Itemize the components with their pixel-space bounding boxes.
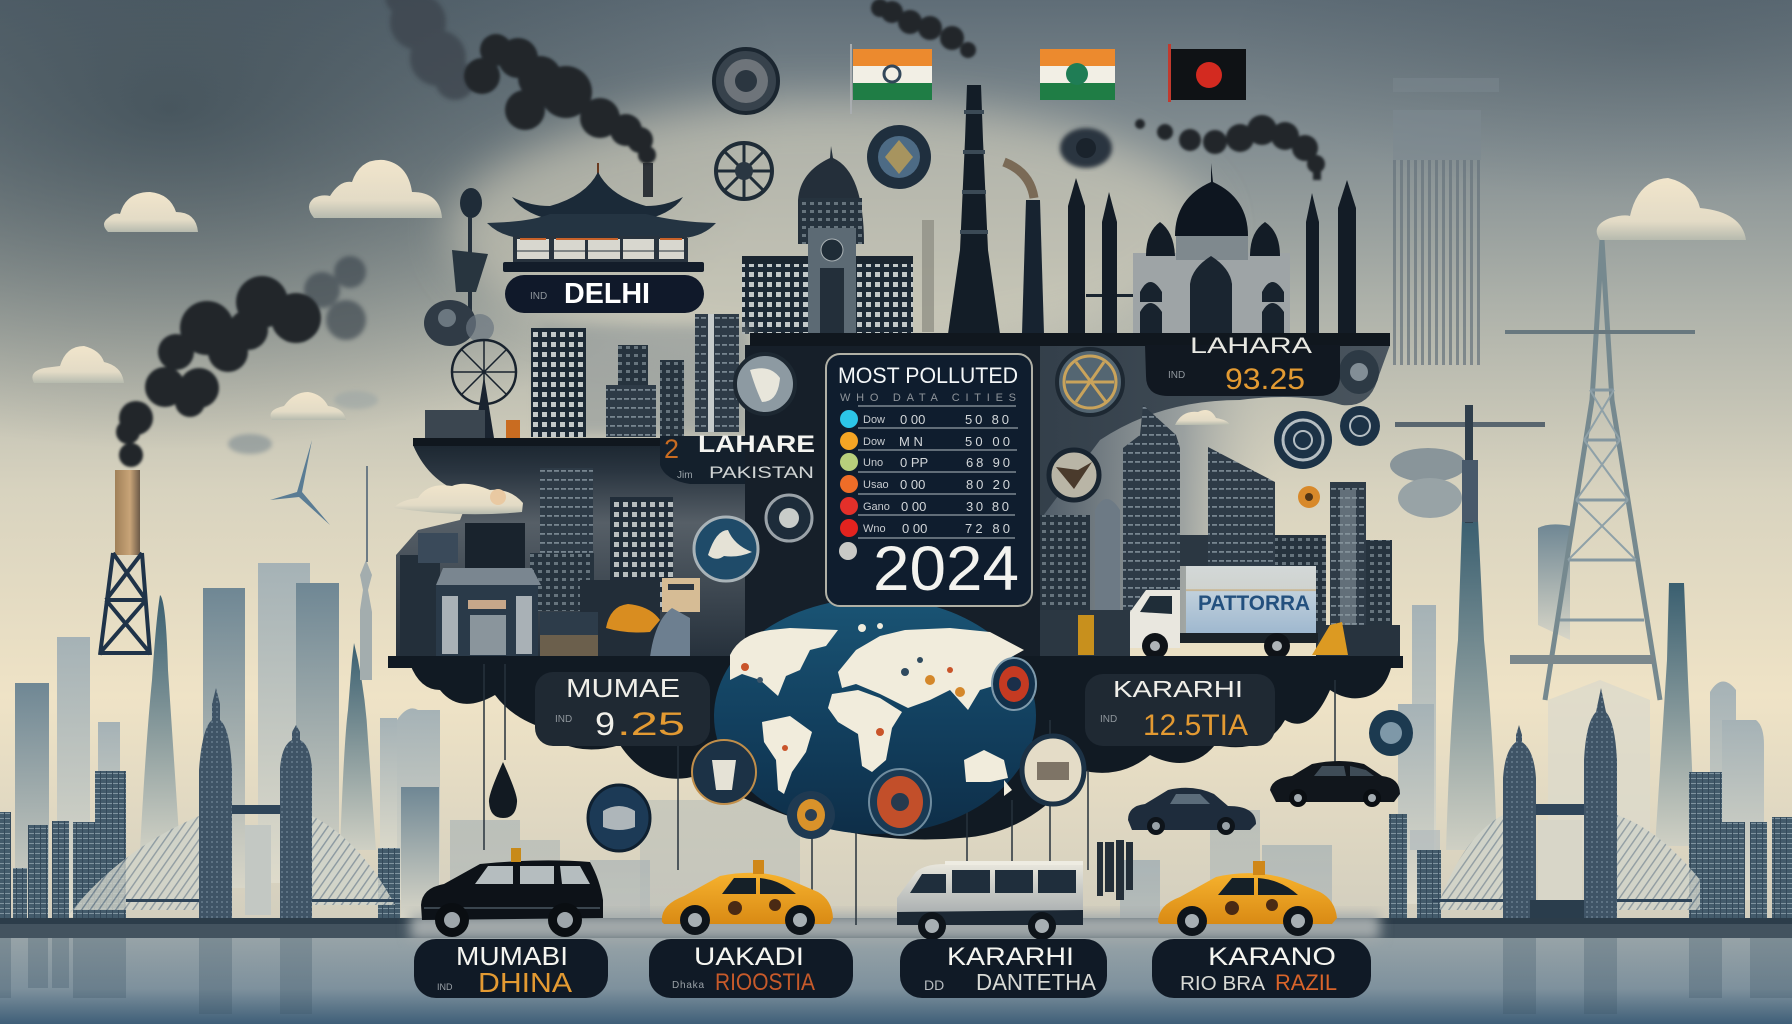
panel subtitle: WHO DATA CITIES	[840, 392, 1016, 404]
vehicle: white van	[897, 861, 1083, 940]
vehicle: taxi 1	[662, 860, 833, 935]
bottom label: Uakadi: UAKADI	[694, 943, 804, 971]
hanging drop icon	[489, 762, 517, 818]
year: 2024	[873, 534, 1019, 604]
table row 6: Wno	[863, 523, 886, 535]
table row 4: Usao	[863, 479, 889, 491]
twin bridge towers left	[70, 688, 400, 918]
waterfront and water	[0, 914, 1792, 1024]
bottom label: Kararhi: DANTETHA	[976, 969, 1097, 995]
right city deck	[1040, 405, 1400, 658]
wind turbine	[270, 440, 368, 562]
city pill: Lahara: 93.25	[1225, 363, 1305, 396]
pagoda	[487, 163, 716, 272]
bottom label: Uakadi: Dhaka	[672, 980, 704, 991]
left city upper deck	[413, 314, 743, 446]
city pill: Kararhi: 12.5TIA	[1143, 709, 1248, 742]
data panel	[826, 354, 1032, 606]
globe medallions	[588, 658, 1413, 851]
bottom label: Kararhi: KARARHI	[947, 943, 1074, 971]
cloud: center left	[394, 484, 523, 514]
bottom label: Mumabi China: DHINA	[478, 967, 572, 998]
city label: Lahare Pakistan: PAKISTAN	[709, 463, 814, 482]
flag: India	[850, 44, 932, 114]
table row 3: Uno	[863, 457, 883, 469]
bottom label: Karano	[1152, 939, 1371, 998]
table row 5: 0 00	[901, 499, 926, 514]
bottom label: Kararhi	[900, 939, 1107, 998]
left city lower deck	[400, 468, 700, 657]
city pill: Mumae: IND	[555, 714, 572, 725]
city pill: Mumae: MUMAE	[566, 673, 680, 703]
vehicle: black SUV	[421, 848, 603, 937]
globe pollution dots	[741, 657, 965, 751]
table row 6	[840, 519, 1010, 537]
distant skyline right	[1389, 520, 1792, 918]
table row 5: 30 80	[966, 499, 1009, 514]
delivery truck	[1130, 566, 1318, 659]
industrial chimney	[1004, 162, 1044, 334]
minar tower	[948, 85, 1000, 334]
city label: Lahare Pakistan: LAHARE	[698, 431, 815, 458]
table row 2: M N	[899, 434, 923, 449]
bottom label: Mumabi China: MUMABI	[456, 941, 568, 971]
lower deck underside clouds	[388, 656, 1403, 840]
flag: black with red disc	[1168, 44, 1246, 102]
left chimney and smoke	[100, 256, 366, 655]
bottom label: Karano: RAZIL	[1275, 970, 1337, 995]
city pill: Delhi: IND	[530, 291, 547, 302]
table row 4: 80 20	[966, 477, 1010, 492]
Taj Mahal	[1068, 163, 1356, 334]
table row 1: 50 80	[965, 412, 1009, 427]
city label: Lahare Pakistan: Jim	[677, 470, 693, 481]
bottom label: Uakadi: RIOOSTIA	[715, 969, 815, 996]
cloud: upper left large	[309, 160, 442, 218]
city pill: Mumae: 9	[595, 706, 615, 742]
cloud: upper left	[104, 192, 198, 232]
table row 6: 0 00	[902, 521, 927, 536]
lattice tower right	[1505, 240, 1695, 700]
bottom label: Karano: RIO BRA	[1180, 973, 1266, 995]
top smoke plume	[385, 0, 656, 197]
city label: Lahare Pakistan: 2	[664, 434, 679, 464]
table row 2	[840, 432, 1010, 450]
left city medallions	[694, 354, 812, 581]
hanging banner icon	[1097, 840, 1133, 900]
faded striped tower block, top right	[1393, 78, 1499, 365]
table row 6: 72 80	[965, 521, 1010, 536]
table row 1	[840, 410, 1009, 428]
city pill: Mumae: .25	[617, 706, 685, 742]
world globe	[714, 598, 1036, 834]
table row 5	[840, 497, 1009, 515]
right medallions	[1049, 349, 1380, 508]
table row 3: 68 90	[966, 455, 1010, 470]
cloud: right large	[1597, 178, 1746, 240]
smoke: right	[1135, 115, 1325, 180]
table row 3: 0 PP	[900, 455, 928, 470]
sedan: small blue	[1128, 788, 1256, 835]
sedan: black	[1270, 761, 1400, 807]
table row 3	[840, 453, 1010, 471]
top medallions	[714, 49, 1112, 199]
panel title: MOST POLLUTED	[838, 363, 1018, 388]
city pill: Kararhi	[1085, 674, 1275, 746]
city pill: Kararhi: IND	[1100, 714, 1117, 725]
city haze behind cars	[450, 800, 1332, 918]
right side dark hull	[1032, 345, 1390, 660]
city pill: Kararhi: KARARHI	[1113, 676, 1243, 702]
central dark column	[745, 345, 1040, 663]
bottom label: Uakadi	[649, 939, 853, 998]
left upper city haze	[540, 325, 750, 435]
distant skyline left	[0, 560, 440, 918]
cloud: left mid	[270, 392, 346, 420]
left pole icon	[424, 188, 494, 346]
table row 4: 0 00	[900, 477, 925, 492]
flag: green emblem	[1040, 49, 1115, 100]
bottom label: Karano: KARANO	[1208, 943, 1336, 971]
table row 5: Gano	[863, 501, 890, 513]
city label: Lahare Pakistan	[660, 431, 815, 484]
table row 2: 50 00	[965, 434, 1010, 449]
cloud: left small	[32, 346, 124, 383]
construction platform	[1510, 655, 1654, 664]
table row 1: 0 00	[900, 412, 925, 427]
vehicle: taxi 2	[1158, 861, 1337, 936]
crane	[1390, 405, 1545, 523]
faded birds and haze marks	[228, 391, 378, 454]
table row 2: Dow	[863, 436, 885, 448]
bottom label: Mumabi China	[414, 939, 608, 998]
city pill: Mumae	[535, 672, 710, 746]
bottom label: Kararhi: DD	[924, 977, 944, 993]
smoke: top middle	[871, 0, 976, 58]
twin bridge towers right	[1432, 688, 1700, 918]
continents	[730, 623, 1024, 796]
bottom label: Mumabi China: IND	[437, 982, 453, 992]
left lower hull	[396, 445, 752, 662]
table row 4	[840, 475, 1010, 493]
upper deck slab	[750, 333, 1390, 346]
hanging cables	[484, 664, 1335, 925]
city pill: Lahara: IND	[1168, 370, 1185, 381]
city pill: Lahara: LAHARA	[1190, 333, 1312, 358]
city pill: Lahara	[1145, 333, 1340, 396]
city pill: Delhi	[505, 275, 704, 313]
table row 1: Dow	[863, 414, 885, 426]
delivery truck: PATTORRA	[1198, 592, 1310, 615]
grey legend dot	[839, 542, 857, 560]
city pill: Delhi: DELHI	[564, 278, 650, 310]
capitol building	[742, 146, 934, 334]
